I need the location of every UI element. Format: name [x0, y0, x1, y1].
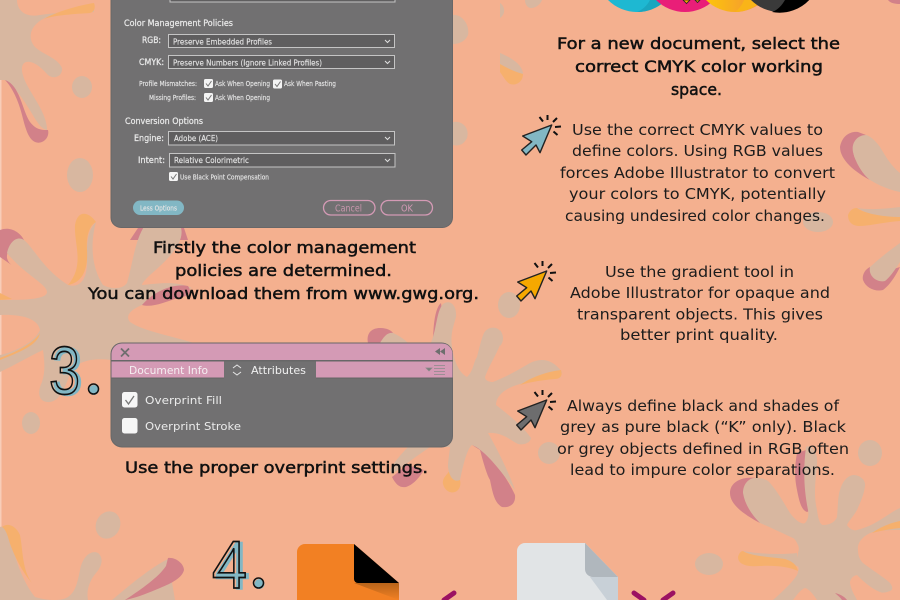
CMYK color circles [596, 0, 821, 13]
heading: CMYK working space [557, 34, 840, 99]
button: less options [133, 200, 184, 215]
RGB dropdown: Preserve Embedded Profiles [173, 38, 272, 46]
icon: teal cursor [522, 115, 561, 155]
CMYK dropdown [139, 56, 394, 68]
profile mismatch options: Ask When Pasting [284, 80, 336, 88]
button: OK: OK [401, 204, 414, 214]
tab: attributes: Attributes [251, 364, 306, 377]
caption: color management policies: policies are determined. [175, 261, 392, 280]
checkbox: overprint stroke [122, 418, 241, 434]
caption: color management policies: Firstly the color management [153, 238, 416, 257]
profile mismatch options: Ask When Opening [215, 94, 270, 102]
icon: cross mark [634, 593, 673, 600]
heading: CMYK working space: space. [671, 80, 722, 99]
text: CMYK values tip: Use the correct CMYK values to [572, 121, 823, 139]
text: pure black tip: grey as pure black (“K” only). Black [560, 418, 846, 436]
button: OK [381, 200, 432, 215]
text: CMYK values tip: causing undesired color changes. [565, 207, 825, 225]
icon: close [121, 348, 129, 356]
engine dropdown: Adobe (ACE) [174, 134, 218, 143]
profile mismatch options: Missing Profiles: [149, 94, 196, 102]
RGB dropdown [142, 34, 394, 48]
black point compensation checkbox [169, 172, 269, 182]
heading: conversion options: Conversion Options [125, 117, 203, 127]
button: less options: Less Options [140, 204, 177, 212]
text: CMYK values tip [560, 121, 835, 225]
text: pure black tip: lead to impure color separations. [570, 461, 835, 479]
button: cancel [324, 200, 375, 215]
icon: collapse [435, 348, 445, 355]
text: pure black tip [557, 397, 849, 479]
CMYK dropdown: Preserve Numbers (Ignore Linked Profiles) [173, 58, 322, 68]
icon: orange file [297, 544, 399, 600]
text: gradient tool tip: transparent objects. This gives [577, 306, 823, 324]
engine dropdown [134, 132, 394, 145]
icon: orange cursor [517, 261, 556, 301]
profile mismatch options: Ask When Opening [215, 80, 270, 88]
black point compensation checkbox: Use Black Point Compensation [180, 174, 269, 182]
heading: CMYK working space: For a new document, select the [557, 34, 840, 53]
intent dropdown [138, 154, 395, 167]
text: gradient tool tip: better print quality. [620, 326, 778, 344]
checkbox: overprint stroke: Overprint Stroke [145, 420, 241, 433]
caption: color management policies [87, 238, 479, 303]
icon: grey cursor [517, 390, 556, 430]
text: pure black tip: Always define black and shades of [567, 397, 840, 415]
text: gradient tool tip [570, 263, 830, 344]
icon: grey file [517, 543, 618, 600]
intent dropdown: Intent: [138, 156, 165, 166]
icon: check mark [444, 593, 454, 600]
CMYK dropdown: CMYK: [139, 58, 164, 68]
previous dropdown edge [170, 0, 395, 2]
RGB dropdown: RGB: [142, 36, 161, 46]
caption: color management policies: You can download them from www.gwg.org. [87, 284, 479, 303]
icon: panel menu [426, 366, 445, 374]
text: gradient tool tip: Adobe Illustrator for opaque and [570, 284, 830, 302]
text: pure black tip: or grey objects defined in RGB often [557, 440, 849, 458]
checkbox: overprint fill [122, 392, 222, 408]
button: cancel: Cancel [335, 204, 362, 214]
heading: color management policies: Color Management Policies [124, 19, 233, 29]
text: CMYK values tip: forces Adobe Illustrator to convert [560, 164, 835, 182]
text: CMYK values tip: define colors. Using RGB values [572, 142, 823, 160]
text: CMYK values tip: your colors to CMYK, potentially [569, 185, 826, 203]
step number 3: 3 [52, 334, 83, 410]
text: gradient tool tip: Use the gradient tool in [605, 263, 794, 281]
step number 3: 3 [49, 333, 80, 409]
panel: attributes overprint [111, 343, 452, 447]
intent dropdown: Relative Colorimetric [174, 156, 249, 165]
tab: document info: Document Info [129, 364, 208, 377]
profile mismatch options [139, 79, 336, 102]
heading: CMYK working space: correct CMYK color working [575, 57, 823, 76]
engine dropdown: Engine: [134, 134, 164, 144]
profile mismatch options: Profile Mismatches: [139, 80, 197, 88]
checkbox: overprint fill: Overprint Fill [145, 394, 222, 407]
caption: overprint settings: Use the proper overprint settings. [125, 458, 428, 477]
dialog: color settings [111, 0, 452, 228]
